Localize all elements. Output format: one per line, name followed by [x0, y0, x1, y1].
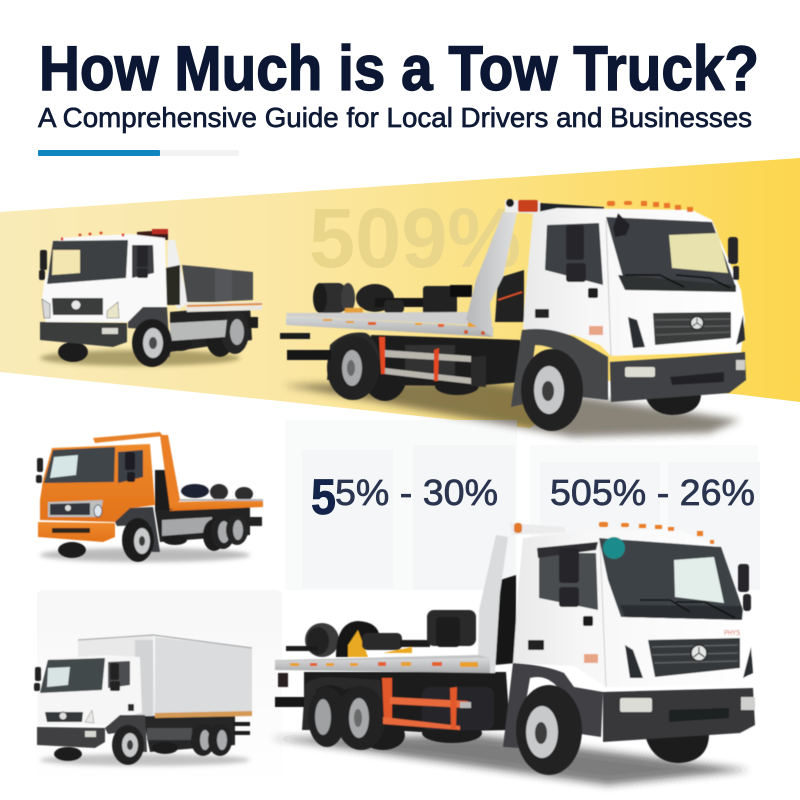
- grille with badge: [653, 312, 731, 345]
- chassis and rear wheels: [275, 672, 510, 750]
- bumper: [603, 688, 755, 742]
- decal: [589, 326, 603, 335]
- gap behind headboard: [495, 270, 524, 322]
- amber roof markers: [607, 201, 693, 212]
- shadow: [270, 735, 750, 785]
- door window and mirror: [528, 542, 598, 650]
- door window and mirror: [535, 223, 603, 318]
- truck: large white flatbed bottom: [270, 522, 755, 785]
- shadow: [282, 380, 740, 437]
- bumper: [610, 352, 746, 402]
- windshield: [599, 538, 743, 620]
- door divider: [600, 540, 606, 687]
- cab: [513, 530, 753, 687]
- lower-left grey panel: [37, 590, 282, 785]
- yellow diagonal band: [0, 158, 800, 428]
- lower stat panels background: [285, 420, 760, 590]
- headboard: [466, 212, 517, 337]
- stat: 505% - 26%: 505% - 26%: [550, 472, 755, 513]
- chassis and rear wheels: [280, 332, 522, 401]
- stat: 55% - 30%: 5: [311, 469, 336, 525]
- far front wheel: [645, 735, 709, 763]
- decal: [584, 654, 598, 663]
- far front wheel: [645, 395, 701, 415]
- cross bar and beacon: [510, 523, 566, 535]
- bed: [275, 655, 490, 673]
- headlight slits: [625, 645, 753, 678]
- front wheel: [516, 685, 582, 775]
- wheel arch: [503, 663, 603, 748]
- cargo parts: [313, 283, 472, 315]
- cargo parts: [286, 610, 476, 657]
- stat: 55% - 30%: 5% - 30%: [335, 472, 498, 513]
- cross bar and beacon: [505, 199, 604, 214]
- wheel arch: [511, 329, 608, 407]
- truck: white box truck: [34, 635, 252, 766]
- camera: [613, 213, 630, 237]
- grille with badge: [648, 638, 740, 677]
- door divider: [606, 220, 611, 356]
- front wheel: [521, 349, 583, 431]
- ghost percentage: 509%: [309, 191, 521, 285]
- stat: 55% - 30%: [311, 469, 498, 525]
- accent bar: [38, 150, 239, 156]
- truck: orange flatbed: [36, 432, 263, 562]
- subtitle: A Comprehensive Guide for Local Drivers and Businesses: [38, 102, 752, 133]
- red cab lettering: PHYS: [724, 630, 740, 637]
- right mirror: [728, 237, 739, 280]
- gap behind headboard: [495, 575, 516, 665]
- cab: [523, 208, 745, 356]
- windshield: [606, 217, 736, 292]
- bed: [286, 312, 493, 337]
- headlight slits: [628, 315, 745, 348]
- truck: white flatbed top-left: [39, 229, 262, 367]
- amber roof markers: [599, 522, 714, 544]
- headboard: [478, 535, 508, 673]
- truck: large white flatbed top-right: [280, 199, 746, 437]
- teal camera: [603, 537, 625, 559]
- right mirror: [738, 564, 751, 611]
